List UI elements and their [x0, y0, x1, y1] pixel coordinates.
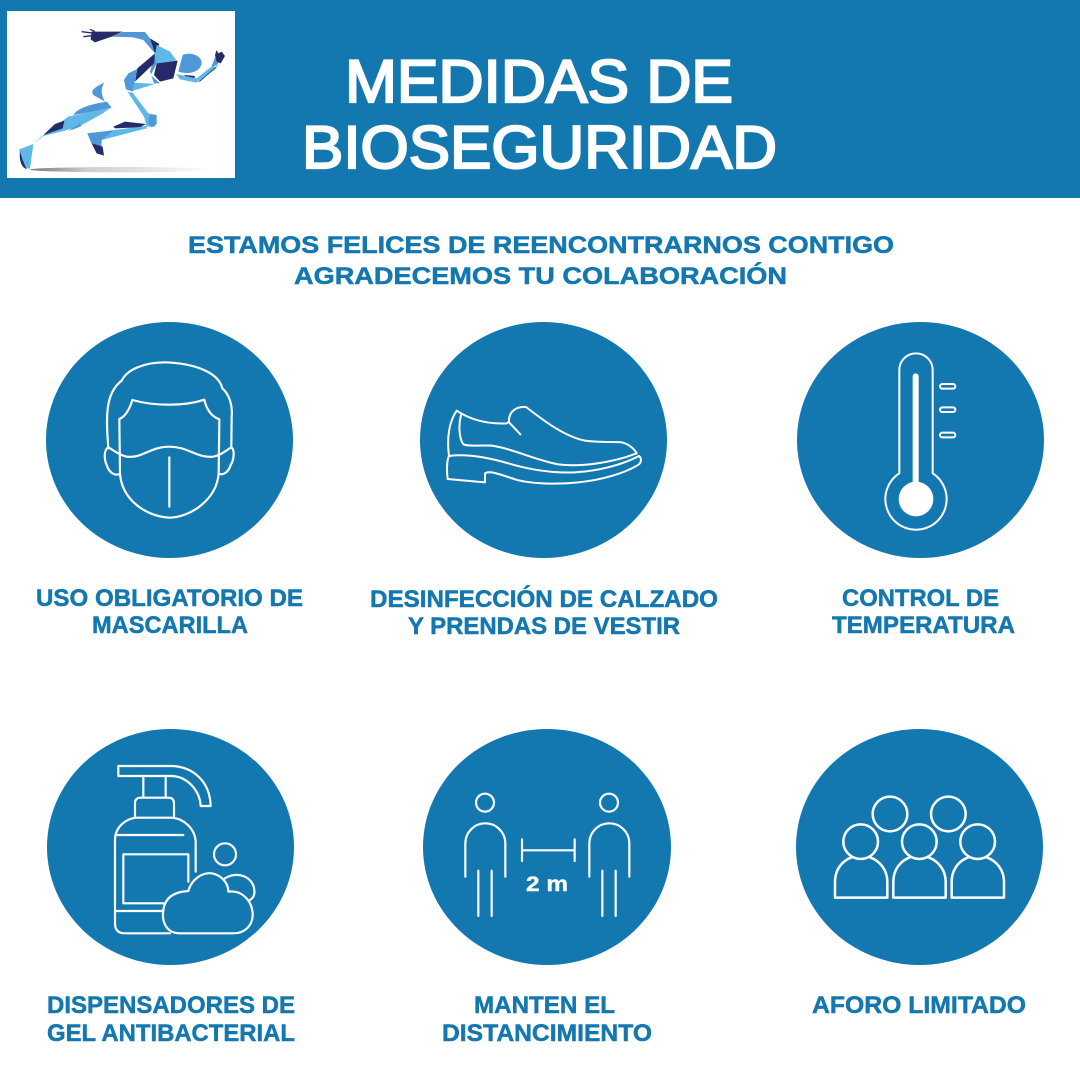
icon: soap dispenser: [115, 766, 254, 933]
icon: face with mask: [105, 362, 234, 518]
icon: shoe: [447, 407, 641, 484]
label: [36, 585, 303, 639]
icon: two people 2 m apart: [465, 794, 629, 916]
subtitle: AGRADECEMOS TU COLABORACIÓN: [294, 262, 787, 290]
label: MANTEN EL: [474, 992, 615, 1019]
label: DISTANCIMIENTO: [442, 1020, 652, 1047]
circle: [423, 729, 671, 965]
icon: thermometer: [885, 353, 955, 530]
label: DISPENSADORES DE: [47, 992, 295, 1019]
title: BIOSEGURIDAD: [302, 114, 777, 181]
subtitle: ESTAMOS FELICES DE REENCONTRARNOS CONTIGO: [188, 232, 894, 259]
subtitle: [188, 232, 894, 290]
label: [442, 992, 652, 1047]
title: MEDIDAS DE: [345, 48, 733, 115]
panel: distanciamiento: [423, 729, 671, 1047]
icon: crowd: [835, 797, 1004, 898]
label: [370, 585, 718, 640]
label: MASCARILLA: [92, 612, 248, 639]
label: Y PRENDAS DE VESTIR: [408, 613, 680, 640]
label: [832, 585, 1015, 639]
panel: temperatura: [797, 322, 1044, 639]
label: GEL ANTIBACTERIAL: [47, 1020, 295, 1047]
header band: [0, 0, 1080, 198]
circle: [47, 729, 294, 965]
panel: gel: [47, 729, 295, 1047]
panel: mascarilla: [36, 322, 303, 639]
label: DESINFECCIÓN DE CALZADO: [370, 585, 718, 613]
circle: [420, 322, 667, 558]
label: TEMPERATURA: [832, 612, 1015, 639]
label: USO OBLIGATORIO DE: [36, 585, 303, 612]
panel: aforo: [796, 729, 1043, 1019]
circle: [46, 322, 293, 558]
label: [47, 992, 295, 1047]
label: AFORO LIMITADO: [812, 992, 1026, 1019]
label: CONTROL DE: [842, 585, 999, 612]
circle: [796, 729, 1043, 965]
logo: runner: [7, 11, 235, 178]
icon: two people 2 m apart: 2 m: [526, 873, 568, 896]
circle: [797, 322, 1044, 558]
panel: calzado: [370, 322, 718, 640]
title: [302, 48, 777, 181]
